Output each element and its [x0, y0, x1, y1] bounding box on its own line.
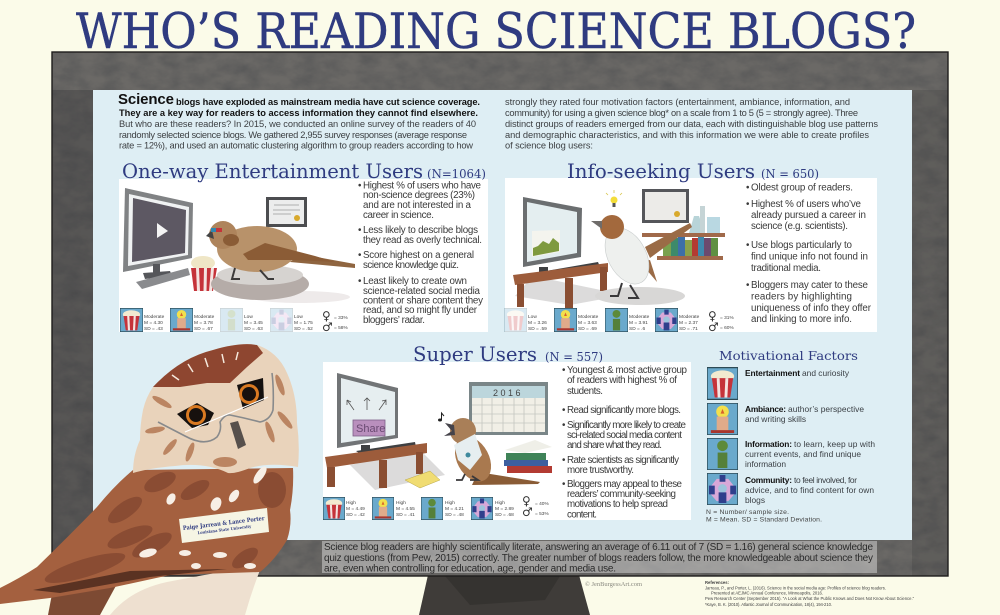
- motivation scores: [504, 308, 734, 334]
- illustration: calendar 2016: [469, 382, 548, 435]
- references: [705, 580, 915, 607]
- icon: community: [707, 473, 738, 505]
- legend note: N = Number/ sample size.: [706, 509, 789, 516]
- intro text: left column: Science: [118, 91, 174, 108]
- bullet list: Highest % of users who have: [363, 180, 482, 192]
- monitor frame: [52, 52, 948, 576]
- intro text: left column: But who are these readers? In 2015, we conducted an online survey of the readers of 40: [119, 119, 476, 129]
- bullet list: readers by highlighting: [751, 292, 852, 302]
- panel: info-seeking users: [504, 178, 877, 334]
- knowledge callout: [322, 541, 877, 574]
- bullet list: science-related social media: [363, 286, 481, 297]
- bullet list: Oldest group of readers.: [751, 183, 853, 194]
- motivation scores: Moderate: [144, 314, 165, 320]
- heading: Motivational Factors: [719, 348, 858, 363]
- bullet list: of readers with highest % of: [567, 375, 677, 386]
- community text: blogs: [745, 495, 765, 505]
- community text: advice, and to find content for own: [745, 485, 874, 495]
- panel: motivational factors: [706, 348, 875, 524]
- bullet list: •: [746, 240, 750, 251]
- motivation scores: ♀: [708, 309, 717, 323]
- motivation scores: ♂: [522, 505, 533, 519]
- motivation scores: M = 2.89: [495, 506, 514, 512]
- intro text: left column: rate = 12%), and used an automatic clustering algorithm to group readers according to how: [119, 140, 473, 150]
- owl wing feathers: [33, 468, 286, 593]
- entertainment text: [745, 368, 850, 378]
- panel: one-way entertainment users: [119, 179, 488, 334]
- motivation scores: M = 4.30: [144, 320, 163, 326]
- legend note: M = Mean. SD = Standard Deviation.: [706, 516, 822, 524]
- bullet list: non-science degrees (23%): [363, 190, 475, 201]
- icon: information: [707, 438, 738, 470]
- bullet list: Bloggers may cater to these: [751, 280, 869, 291]
- intro text: right column: of science blog users:: [505, 140, 593, 150]
- intro text: right column: strongly they rated four motivation factors (entertainment, ambiance, information, and: [505, 97, 850, 107]
- motivation scores: M = 3.45: [244, 320, 263, 326]
- motivation scores: SD = .42: [346, 512, 365, 518]
- bullet list: [358, 180, 483, 326]
- bullet list: career in science.: [363, 210, 434, 221]
- bullet list: •: [358, 225, 362, 236]
- owl beak: [230, 421, 246, 449]
- motivation scores: SD = .52: [294, 326, 313, 332]
- illustration: monitor with share button: Share: [356, 423, 385, 435]
- motivation scores: Low: [528, 314, 537, 320]
- bullet list: [562, 365, 688, 520]
- bullet list: and linking to more info.: [751, 314, 852, 325]
- illustration: framed certificate: [266, 197, 307, 227]
- bullet list: read, and so might fly under: [363, 305, 478, 316]
- bullet list: •: [746, 280, 750, 291]
- ambiance text: and writing skills: [745, 414, 806, 424]
- illustration: singing bird in jersey: [444, 418, 540, 488]
- bullet list: uniqueness of info they offer: [751, 303, 872, 314]
- motivation scores: [323, 494, 549, 520]
- bullet list: Least likely to create own: [363, 276, 467, 287]
- bullet list: Highest % of users who’ve: [751, 199, 862, 210]
- intro text: right column: and demographic characteristics, and with this information we were able to create profiles: [505, 130, 869, 140]
- motivation scores: SD = .69: [578, 326, 597, 332]
- bullet list: Bloggers may appeal to these: [567, 479, 683, 490]
- bullet list: •: [562, 420, 566, 431]
- intro text: left column: [118, 91, 480, 150]
- owl lower tail: [48, 582, 118, 615]
- motivation scores: SD = .68: [495, 512, 514, 518]
- bullet list: •: [562, 455, 566, 466]
- motivation scores: M = 3.26: [528, 320, 547, 326]
- motivation scores: M = 3.63: [578, 320, 597, 326]
- owl eyes: [177, 378, 264, 428]
- bullet list: content.: [567, 510, 597, 520]
- motivation scores: M = 3.91: [629, 320, 648, 326]
- ambiance text: [745, 404, 864, 424]
- illustration: stack of books: [504, 440, 552, 473]
- illustration: yellow notepad: [405, 471, 440, 488]
- copyright credit: © JenBurgessArt.com: [585, 581, 642, 588]
- illustration: light bulb: [606, 190, 622, 207]
- bullet list: •: [562, 405, 566, 416]
- motivation scores: = 33%: [334, 315, 348, 321]
- bullet list: and share what they read.: [567, 440, 662, 451]
- legend note: [706, 509, 822, 524]
- bullet list: •: [562, 479, 566, 490]
- bullet list: •: [746, 183, 750, 194]
- owl head: [133, 344, 299, 473]
- owl body and wing: [0, 468, 293, 604]
- motivation scores: = 53%: [535, 511, 549, 517]
- knowledge callout: Science blog readers are highly scientifically literate, answering an average of 6.11 out of 7 (SD = 1.16) general science knowledge: [324, 542, 873, 553]
- intro text: right column: community) for using a given science blog* on a scale from 1 to 5 (5 = strongly agree). Three: [505, 108, 858, 118]
- heading: one-way entertainment users: (N=1064): [427, 167, 486, 181]
- bullet list: students.: [567, 386, 603, 397]
- motivation scores: M = 1.75: [294, 320, 313, 326]
- motivation scores: ♀: [522, 494, 531, 508]
- bullet list: •: [562, 365, 566, 376]
- illustration: certificate and bookshelf: [642, 189, 725, 260]
- illustration: sparrow on cushion: [206, 221, 355, 303]
- heading: super users: Super Users: [413, 343, 537, 366]
- motivation scores: SD = .43: [144, 326, 163, 332]
- heading: info-seeking users: (N = 650): [761, 167, 819, 181]
- icon: ambiance: [707, 403, 738, 435]
- bullet list: •: [358, 276, 362, 287]
- illustration: popcorn bucket: [191, 256, 217, 291]
- bullet list: Use blogs particularly to: [751, 240, 853, 251]
- motivation scores: Low: [244, 314, 253, 320]
- motivation scores: SD = .67: [194, 326, 213, 332]
- information text: information: [745, 459, 786, 469]
- entertainment text: and curiosity: [802, 368, 850, 378]
- name tag: Paige Jarreau & Lance Porter: [183, 516, 266, 532]
- intro text: left column: They are a key way for readers to access information they cannot find elsewhere.: [119, 108, 478, 118]
- references: Pew Research Center (September 2015). “A Look at What the Public Knows and Does Not Know About Science.”: [705, 596, 915, 601]
- intro text: right column: [505, 97, 878, 150]
- bullet list: science knowledge quiz.: [363, 260, 459, 271]
- intro text: right column: distinct groups of readers emerged from our data, each with distinguishable blog use patterns: [505, 119, 878, 129]
- motivation scores: High: [396, 500, 406, 506]
- bullet list: bloggers’ radar.: [363, 315, 425, 326]
- illustration: monitor with share button: [325, 373, 445, 490]
- owl face markings: [145, 374, 294, 467]
- knowledge callout: quiz questions (from Pew, 2015) correctly. The greater number of blogs readers follow, the more knowledgeable about science they: [324, 553, 873, 564]
- ambiance text: author’s perspective: [788, 404, 864, 414]
- motivation scores: Moderate: [194, 314, 215, 320]
- bullet list: they read as overly technical.: [363, 235, 482, 246]
- community text: Community:: [745, 475, 792, 485]
- bullet list: and are not interested in a: [363, 200, 472, 211]
- owl white spots: [138, 465, 269, 569]
- bullet list: •: [358, 180, 362, 192]
- bullet list: Youngest & most active group: [567, 365, 688, 376]
- motivation scores: M = 2.37: [679, 320, 698, 326]
- motivation scores: SD = .48: [445, 512, 464, 518]
- owl glasses: [158, 373, 273, 442]
- monitor stand: [419, 575, 590, 615]
- illustration: bird in lab coat: [591, 215, 692, 305]
- intro text: left column: blogs have exploded as mainstream media have cut science coverage.: [176, 97, 480, 107]
- heading: one-way entertainment users: One-way Entertainment Users: [122, 160, 423, 183]
- illustration: monitor on desk: [513, 197, 625, 308]
- motivation scores: Moderate: [679, 314, 700, 320]
- bullet list: Read significantly more blogs.: [567, 405, 681, 416]
- heading: super users: (N = 557): [545, 350, 603, 364]
- bullet list: readers’ community-seeking: [567, 489, 676, 500]
- bullet list: •: [358, 250, 362, 261]
- motivation scores: Low: [294, 314, 303, 320]
- information text: Information:: [745, 439, 792, 449]
- bullet list: Rate scientists as significantly: [567, 455, 679, 466]
- bullet list: science (e.g. scientists).: [751, 221, 848, 232]
- motivation scores: M = 3.78: [194, 320, 213, 326]
- intro text: left column: randomly selected science blogs. We gathered 2,955 survey responses (average response: [119, 130, 467, 140]
- panel: super users: [323, 362, 691, 520]
- bullet list: traditional media.: [751, 263, 821, 274]
- heading: super users: [413, 343, 603, 366]
- community text: [745, 475, 874, 505]
- motivation scores: SD = .71: [679, 326, 698, 332]
- motivation scores: M = 4.55: [396, 506, 415, 512]
- motivation scores: SD = .41: [396, 512, 415, 518]
- motivation scores: = 60%: [720, 325, 734, 331]
- bullet list: more trustworthy.: [567, 465, 634, 476]
- motivation scores: ♂: [708, 320, 719, 334]
- bullet list: content or share content they: [363, 296, 483, 306]
- icon: music note: [438, 413, 444, 422]
- motivation scores: M = 4.21: [445, 506, 464, 512]
- illustration: monitor with play button: [123, 188, 193, 289]
- name tag: Louisiana State University: [197, 524, 252, 535]
- bullet list: [746, 183, 872, 325]
- owl belly: [110, 565, 262, 615]
- information text: to learn, keep up with: [794, 439, 875, 449]
- motivation scores: High: [445, 500, 455, 506]
- owl crown: [153, 344, 263, 387]
- bullet list: find unique info not found in: [751, 252, 868, 262]
- illustration: calendar 2016: 2016: [493, 388, 523, 398]
- motivation scores: ♀: [322, 309, 331, 323]
- motivation scores: SD = .59: [528, 326, 547, 332]
- heading: info-seeking users: Info-seeking Users: [567, 160, 755, 183]
- information text: [745, 439, 875, 469]
- community text: to feel involved, for: [794, 475, 857, 485]
- motivation scores: High: [495, 500, 505, 506]
- references: References:: [705, 580, 729, 585]
- bullet list: sci-related social media content: [567, 430, 682, 441]
- entertainment text: Entertainment: [745, 368, 800, 378]
- motivation scores: SD = .6: [629, 326, 645, 332]
- icon: entertainment: [707, 368, 738, 399]
- motivation scores: = 58%: [334, 325, 348, 331]
- bullet list: Score highest on a general: [363, 250, 474, 261]
- motivation scores: = 40%: [535, 501, 549, 507]
- illustration: owl mascot: [0, 344, 299, 615]
- motivation scores: Moderate: [578, 314, 599, 320]
- bullet list: Less likely to describe blogs: [363, 225, 478, 236]
- motivation scores: High: [346, 500, 356, 506]
- motivation scores: SD = .63: [244, 326, 263, 332]
- bullet list: •: [746, 199, 750, 210]
- knowledge callout: are, even when controlling for education, age, gender and media use.: [324, 564, 616, 574]
- references: *Kaye, B. K. (2010). Atlantic Journal of Communication, 18(4), 194-210.: [705, 602, 832, 607]
- monitor screen: [93, 90, 912, 540]
- ambiance text: Ambiance:: [745, 404, 786, 414]
- name tag: [179, 508, 269, 543]
- bullet list: already pursued a career in: [751, 210, 866, 221]
- motivation scores: ♂: [322, 320, 333, 334]
- motivation scores: M = 4.49: [346, 506, 365, 512]
- motivation scores: = 31%: [720, 315, 734, 321]
- motivation scores: [120, 308, 348, 334]
- bullet list: Significantly more likely to create: [567, 420, 687, 431]
- information text: current events, and find unique: [745, 449, 861, 459]
- bullet list: motivations to help spread: [567, 499, 668, 510]
- motivation scores: Moderate: [629, 314, 650, 320]
- references: Jarreau, P., and Porter, L. (2016). Science in the social media age: Profiles of science blog readers.: [705, 586, 886, 590]
- references: Presented at AEJMC Annual Conference, Minneapolis, 2016.: [711, 590, 823, 596]
- title: WHO’S READING SCIENCE BLOGS?: [76, 3, 916, 60]
